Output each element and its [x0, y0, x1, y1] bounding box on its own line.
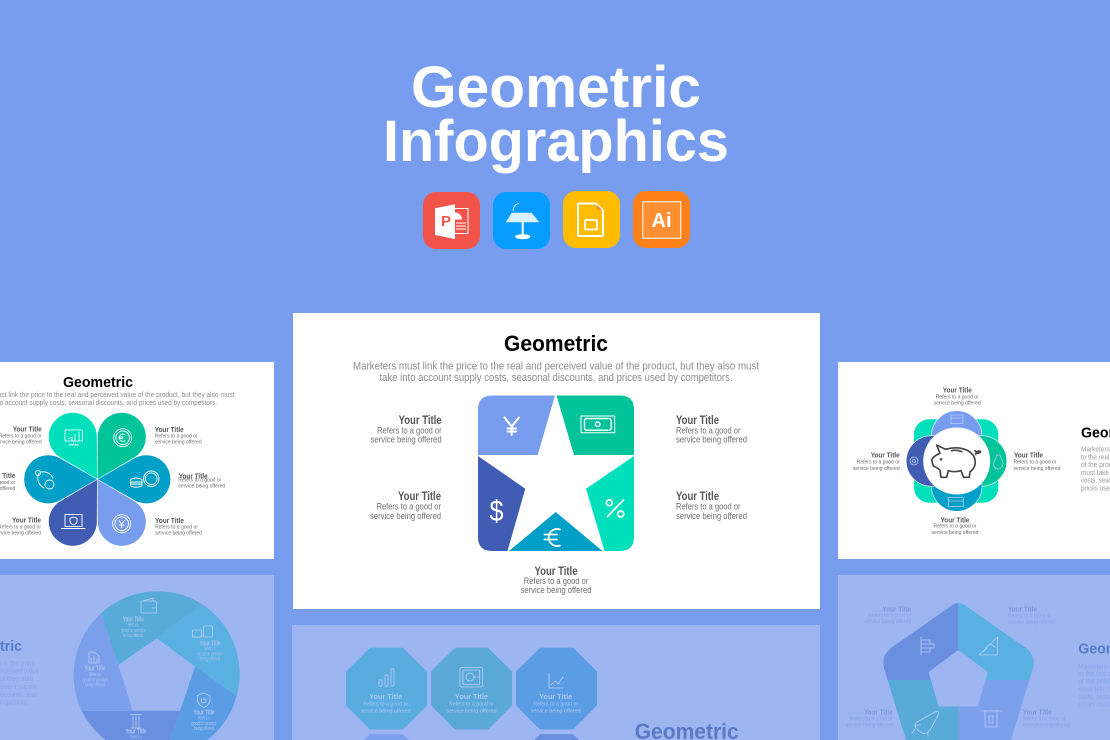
label: service being offered: [446, 709, 496, 715]
label: left: Your Title: [871, 451, 900, 460]
icon: yen coin: [113, 515, 131, 533]
icon: monitor: [65, 430, 82, 445]
panel: faded lower right slide with pentagon: [838, 575, 1110, 740]
label: Your Title: [455, 692, 489, 701]
app icons row: [423, 191, 690, 249]
label: upper left: [864, 604, 912, 625]
label: bottom: Your Title: [126, 726, 147, 735]
label: top left: [0, 426, 42, 444]
icon: banknote: [581, 416, 615, 433]
label: middle right: Refers to a good or: [178, 478, 221, 484]
label: top left: Refers to a good or: [0, 433, 42, 439]
panel: faded lower center slide with octagons: [292, 625, 820, 740]
icon: piggy bank: [932, 445, 981, 477]
icon: percent: [606, 500, 624, 517]
label: bottom: Refers to a good or: [934, 524, 977, 530]
label: upper right: service being offered: [676, 435, 747, 445]
green rounded square: [914, 419, 998, 503]
label: [531, 692, 581, 715]
segment: yen: [478, 396, 555, 455]
label: Refers to a good or: [533, 702, 578, 708]
petal: top: [931, 411, 982, 436]
label: right: service being offered: [1014, 466, 1060, 472]
label: upper right: Your Title: [1008, 605, 1038, 614]
label: right: Your Title: [1014, 451, 1044, 460]
label: top right: [154, 426, 202, 444]
label: bottom: Your Title: [940, 515, 970, 524]
icon: coin left: [910, 457, 918, 465]
center circle: [923, 428, 990, 494]
label: upper right: Refers to a good or: [676, 425, 741, 435]
icon: card top: [951, 415, 963, 424]
label: upper right: Your Title: [676, 415, 719, 427]
panel: right slide with piggy bank: [838, 362, 1110, 559]
segment: right: [157, 604, 240, 696]
label: upper left: Refers to a good or: [377, 425, 442, 435]
label: Refers to a good or: [449, 702, 494, 708]
label: lower left: Your Title: [864, 708, 893, 717]
icon: euro: [544, 529, 560, 546]
icon: PowerPoint: P: [441, 213, 451, 230]
label: service being offered: [531, 709, 581, 715]
label: middle right: Your Title: [179, 471, 208, 480]
icon: cycle: [36, 470, 54, 489]
label: left: good or service: [82, 678, 108, 684]
label: upper left: Refers to a good or: [868, 613, 911, 619]
label: lower left: service being offered: [846, 722, 893, 728]
icon: wallet: [141, 598, 156, 613]
slide description: [0, 392, 234, 406]
label: lower right: Refers to a good or: [676, 502, 741, 512]
icon: notes: [192, 626, 212, 637]
label: service being offered: [361, 709, 411, 715]
label: left: service being offered: [853, 466, 900, 472]
label: top: service being offered: [934, 400, 981, 406]
flower chart: [24, 412, 171, 546]
label: bottom: [932, 517, 978, 535]
label: lower right: service being offered: [1023, 722, 1070, 728]
label: bottom: [126, 726, 147, 740]
label: upper left: service being offered: [371, 435, 442, 445]
segment: upper left: [870, 595, 958, 680]
icon: Google Slides: [563, 191, 620, 248]
label: lower right: being offered: [194, 726, 214, 732]
label: bottom right: Your Title: [155, 516, 185, 525]
label: bottom left: Your Title: [12, 516, 42, 525]
segment: upper right: [958, 595, 1043, 680]
label: lower right: Refers to a: [198, 716, 210, 722]
icon: flag bars: [921, 637, 934, 655]
label: bottom left: [0, 517, 41, 536]
panel: left slide with flower: [0, 362, 274, 559]
petal: right: [978, 435, 1006, 487]
label: top: being offered: [123, 633, 143, 639]
slide description: Marketers must link the price to the real and perceived value of the product, but they also must: [353, 360, 759, 372]
label: lower right: Your Title: [676, 491, 719, 503]
slide description: [353, 360, 759, 384]
slide description: [1081, 446, 1110, 492]
label: bottom right: service being offered: [155, 531, 202, 537]
icon: euro coin: [114, 429, 132, 447]
octagon: second row left: [346, 734, 427, 740]
segment: lower left: [870, 680, 958, 740]
label: left: being offered: [85, 682, 105, 688]
label: lower left: service being offered: [370, 511, 441, 521]
slide heading: Geometric: [504, 331, 608, 356]
label: lower right: good or service: [192, 721, 216, 727]
panel: center slide with star: [293, 313, 820, 609]
icon: card bottom: [948, 498, 963, 506]
icon: yen: [504, 418, 519, 435]
label: bottom right: [155, 518, 202, 536]
segment: lower right: [164, 667, 237, 740]
icon: rocket: [912, 711, 938, 737]
segment: banknote: [556, 396, 634, 455]
label: bottom right: Refers to a good or: [155, 524, 198, 530]
label: left: [82, 664, 108, 688]
star chart: [478, 396, 634, 551]
label: lower right: [192, 707, 216, 732]
segment: bottom: [82, 711, 180, 740]
label: top: Your Title: [943, 386, 972, 395]
label: lower left: Refers to a good or: [850, 716, 893, 722]
segment: left: [74, 613, 133, 711]
label: Your Title: [539, 692, 573, 701]
slide description: [0, 661, 39, 706]
label: upper left: Your Title: [882, 604, 912, 613]
title: [383, 55, 729, 174]
label: lower right: [1023, 708, 1070, 728]
label: top right: Refers to a good or: [155, 434, 198, 440]
label: left: Your Title: [84, 664, 106, 673]
label: left: Refers to a good or: [857, 460, 900, 466]
label: lower right: Your Title: [1023, 708, 1052, 717]
slide description: take into account supply costs, seasonal discounts, and prices used by competitors.: [380, 372, 732, 384]
icon: PowerPoint: [423, 192, 480, 249]
label: top: Refers to a: [128, 623, 139, 629]
icon: chart triangle: [979, 637, 998, 655]
petal: left: [906, 435, 935, 487]
label: Refers to a good or: [363, 702, 408, 708]
icon: bars: [379, 669, 394, 686]
label: right: Refers to a: [204, 646, 216, 652]
label: Your Title: [369, 692, 403, 701]
label: lower left: Your Title: [398, 491, 441, 503]
icon: money bag: [994, 455, 1003, 469]
label: bottom: service being offered: [932, 530, 978, 536]
label: top: [934, 387, 980, 406]
label: upper right: [676, 415, 747, 445]
pentagon ring chart: [74, 591, 240, 740]
label: upper right: service being offered: [1008, 620, 1055, 626]
label: right: Your Title: [200, 638, 221, 647]
icon: Keynote: [493, 192, 550, 249]
label: upper left: [371, 415, 442, 445]
label: upper right: Refers to a good or: [1008, 614, 1051, 620]
label: right: [1014, 452, 1060, 471]
panel: faded lower left slide with pentagon ring: [0, 575, 274, 740]
octagon: bar chart: [346, 648, 427, 730]
petal: bottom: [931, 482, 982, 511]
icon: Illustrator: [633, 191, 690, 248]
icon: coins: [130, 471, 159, 487]
icon: dollar: $: [490, 495, 504, 528]
label: top: [121, 614, 146, 639]
pentagon chart: [870, 595, 1043, 740]
center pentagon: [932, 653, 985, 704]
label: lower right: service being offered: [676, 511, 747, 521]
segment: dollar: [478, 456, 525, 551]
label: top left: Your Title: [13, 425, 42, 434]
label: top right: service being offered: [155, 440, 202, 446]
label: right: being offered: [200, 656, 220, 662]
label: [446, 692, 496, 715]
label: left: [852, 452, 900, 471]
label: middle left: [0, 472, 16, 490]
label: top: good or service: [121, 628, 146, 634]
label: top right: Your Title: [155, 425, 184, 434]
label: top: Your Title: [123, 614, 144, 623]
label: right: Refers to a good or: [1014, 460, 1057, 466]
label: bottom: service being offered: [520, 585, 592, 595]
label: bottom: Refers to a good or: [524, 576, 588, 586]
icon: atm: [981, 711, 1002, 727]
segment: lower right: [958, 680, 1043, 740]
title: Geometric: [411, 55, 701, 120]
label: lower right: Refers to a good or: [1023, 716, 1066, 722]
octagon: safe: [431, 648, 512, 730]
segment: percent: [586, 456, 634, 551]
icon: laptop shield: [62, 514, 85, 528]
label: right: good or service: [198, 652, 222, 658]
segment: euro: [509, 512, 602, 551]
label: lower left: Refers to a good or: [376, 502, 441, 512]
label: bottom: Your Title: [534, 566, 578, 578]
label: upper left: Your Title: [399, 415, 442, 427]
slide description: [1078, 663, 1110, 708]
segment: top: [101, 591, 202, 665]
slide heading: Geometric: [63, 374, 133, 391]
label: lower left: [370, 491, 441, 521]
label: lower right: [676, 491, 747, 521]
label: upper right: [1008, 605, 1055, 626]
octagon: second row right: [516, 734, 597, 740]
icon: line chart: [549, 673, 563, 688]
label: right: [198, 638, 222, 662]
label: top: Refers to a good or: [936, 394, 979, 400]
label: left: Refers to a: [90, 672, 101, 678]
icon: safe: [460, 668, 482, 687]
label: middle right: [178, 473, 225, 488]
label: lower right: Your Title: [194, 707, 215, 716]
label: bottom: [520, 566, 592, 595]
icon: Illustrator: Ai: [652, 210, 672, 232]
label: upper left: service being offered: [864, 619, 911, 625]
label: lower left: [846, 708, 893, 728]
icon: shield: [198, 693, 210, 708]
label: [361, 692, 411, 715]
icon: chart doc: [89, 652, 99, 663]
icon: bank: [130, 714, 142, 728]
octagon: line chart: [516, 648, 597, 730]
label: middle right: service being offered: [178, 484, 225, 490]
title: Infographics: [383, 109, 729, 174]
